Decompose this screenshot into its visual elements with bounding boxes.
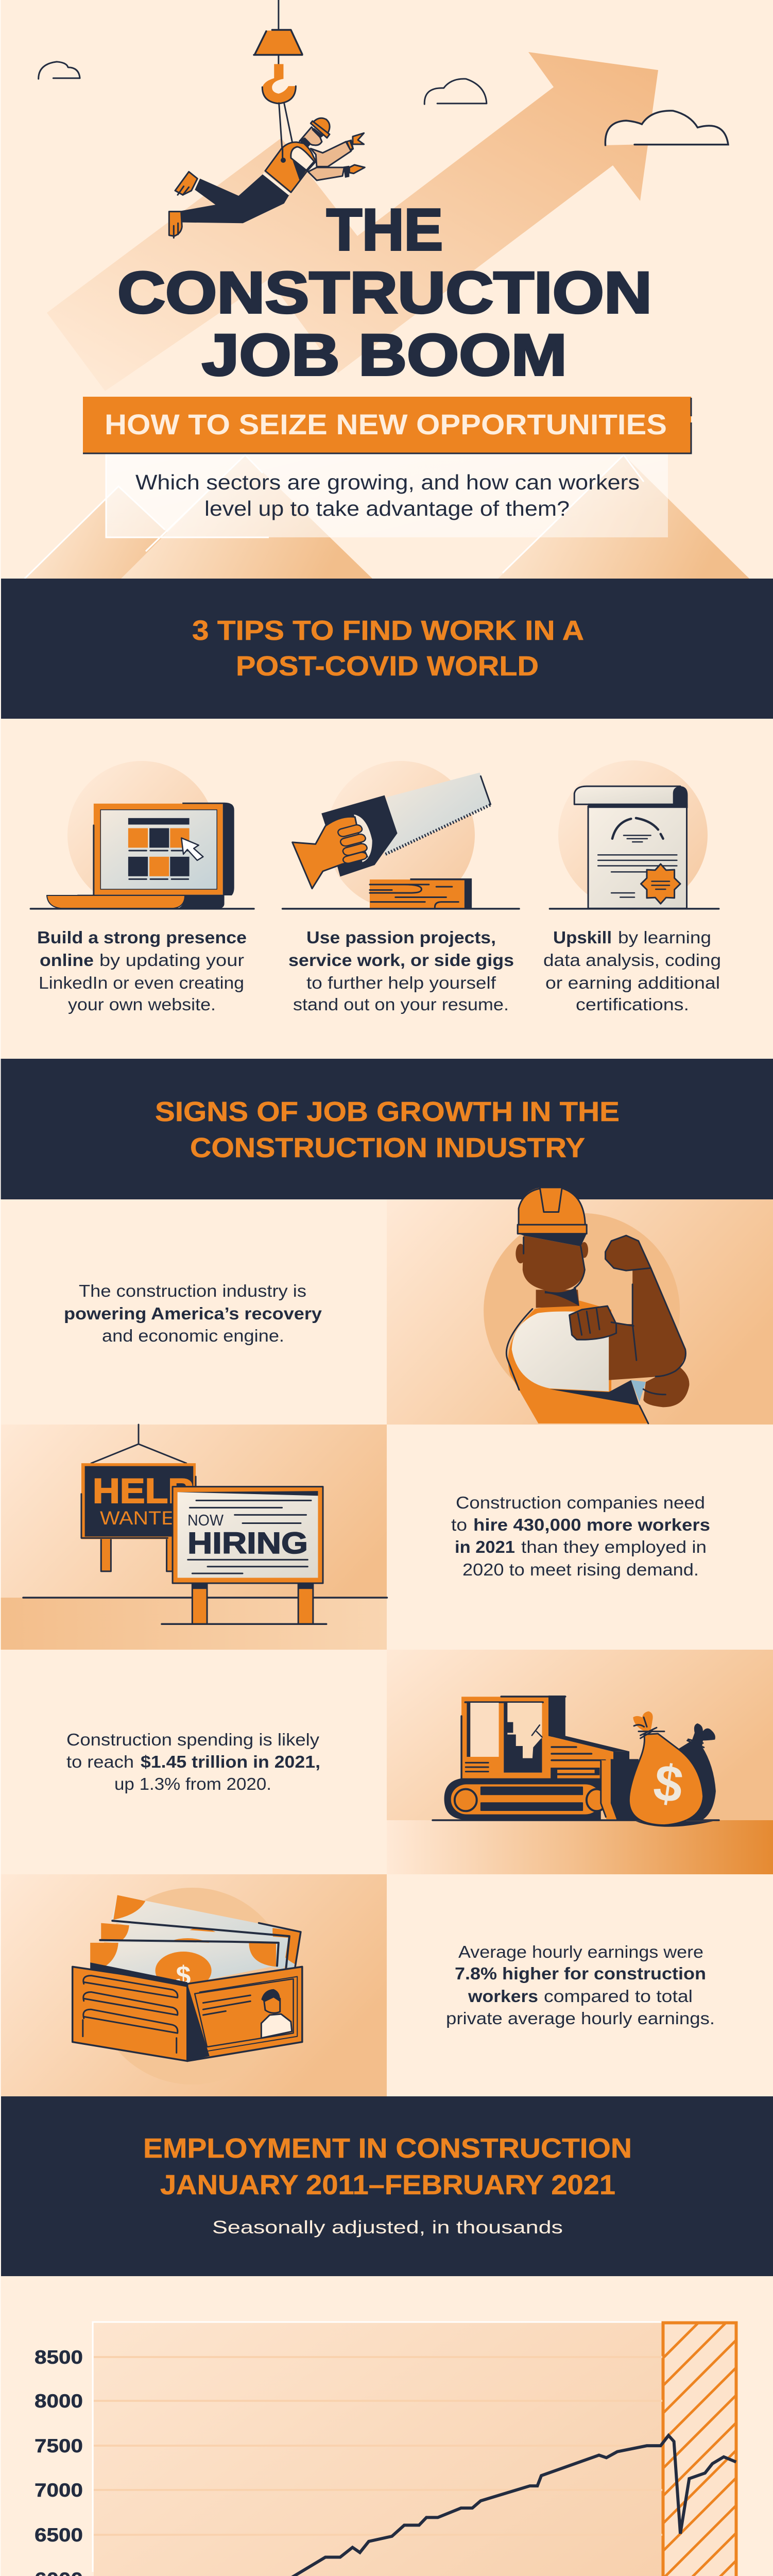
text: hire 430,000 workers: 2020 to meet rising demand. (462, 1560, 699, 1579)
text: hire 430,000 workers (451, 1493, 710, 1579)
title: THE (327, 197, 443, 263)
text: hire 430,000 workers: Construction companies need (456, 1493, 705, 1512)
illustration: help wanted sign: HELP (93, 1471, 193, 1511)
background panel left (0, 1874, 387, 2096)
intro text: Which sectors are growing, and how can workers (135, 470, 640, 494)
data line (94, 2435, 736, 2576)
tip 2 text: Use passion projects, (306, 928, 496, 947)
panel: employment heading: Seasonally adjusted, in thousands (212, 2217, 563, 2238)
subtitle banner (83, 397, 691, 453)
tip 3 text: by learning (618, 928, 711, 947)
tip 1 text: Build a strong presence (37, 928, 247, 947)
panel: 3 tips heading: POST-COVID WORLD (236, 651, 539, 682)
text: powering recovery: The construction industry is (79, 1281, 306, 1300)
grid lines (94, 2357, 662, 2576)
y axis labels: 6500 (35, 2524, 83, 2546)
background panel left (0, 1425, 387, 1650)
tip 2 text: to further help yourself (306, 973, 496, 992)
illustration: worker hanging from crane (169, 103, 365, 238)
illustration: now hiring sign: NOW (187, 1511, 224, 1529)
floor band (0, 1598, 387, 1650)
illustration: help wanted sign (81, 1425, 196, 1571)
text: construction spending: Construction spending is likely (66, 1730, 320, 1749)
mountains background (25, 455, 749, 579)
tip 1 text: online (40, 951, 94, 970)
panel: hiring row (0, 1425, 710, 1650)
hero section (25, 0, 749, 579)
y axis labels (35, 2347, 83, 2576)
icon: cloud right (605, 111, 728, 145)
text: hourly earnings: private average hourly earnings. (446, 2009, 715, 2028)
panel: employment heading: EMPLOYMENT IN CONSTRUCTION (143, 2133, 632, 2164)
y axis labels: 7500 (35, 2435, 83, 2456)
illustration: wallet with cash: $ (176, 1961, 191, 1991)
text: hire 430,000 workers: hire 430,000 more workers (473, 1515, 710, 1534)
y axis labels: 7000 (35, 2480, 83, 2501)
text: construction spending: up 1.3% from 2020. (114, 1774, 271, 1793)
text: construction spending: $1.45 trillion in 2021, (141, 1752, 320, 1771)
title: CONSTRUCTION (117, 260, 652, 326)
panel: tip 3 upskill (543, 760, 721, 1014)
tip 1 text (37, 928, 247, 1014)
subtitle banner: HOW TO SEIZE NEW OPPORTUNITIES (105, 408, 667, 440)
text: hourly earnings: workers (468, 1987, 538, 2006)
tip 1 text: your own website. (68, 995, 216, 1014)
tip 3 text: data analysis, coding (543, 951, 721, 970)
text: construction spending: to reach (66, 1752, 134, 1771)
panel: employment heading (1, 2096, 773, 2276)
tip 2 text: service work, or side gigs (288, 951, 514, 970)
illustration: help wanted sign: WANTED (100, 1507, 191, 1529)
rising arrow background (47, 52, 658, 391)
text: hourly earnings: 7.8% higher for construction (455, 1964, 706, 1983)
y axis labels: 8500 (35, 2347, 83, 2368)
y axis labels: 8000 (35, 2391, 83, 2412)
illustration: money bags (433, 1711, 719, 1827)
text: hire 430,000 workers: than they employed in (521, 1537, 707, 1556)
text: construction spending (66, 1730, 320, 1793)
tip 3 text: certifications. (576, 995, 689, 1014)
illustration: flexing worker (484, 1188, 689, 1423)
tip 3 text: Upskill (553, 928, 612, 947)
intro text (135, 470, 640, 520)
panel: signs of job growth heading (1, 1059, 773, 1199)
panel: 3 tips heading: 3 TIPS TO FIND WORK IN A (192, 615, 584, 646)
panel: signs of job growth heading: CONSTRUCTION INDUSTRY (190, 1132, 585, 1163)
floor band (387, 1820, 773, 1874)
text: powering recovery (64, 1281, 322, 1345)
panel: 3 tips heading (1, 579, 773, 719)
translucent subtitle panel (106, 453, 668, 537)
icon: laptop (30, 761, 254, 909)
title (117, 197, 652, 388)
panel: tip 2 passion projects (283, 761, 519, 1014)
tip 1 text: LinkedIn or even creating (39, 973, 244, 992)
icon: hand saw (283, 761, 519, 909)
left edge strip (0, 0, 1, 2576)
tip 2 text (288, 928, 514, 1014)
illustration: now hiring sign (23, 1487, 387, 1624)
background panel right (387, 1650, 773, 1820)
text: hourly earnings: compared to total (544, 1987, 693, 2006)
text: powering recovery: powering America’s recovery (64, 1304, 322, 1323)
text: hire 430,000 workers: in 2021 (455, 1537, 515, 1556)
text: powering recovery: and economic engine. (102, 1326, 284, 1345)
panel: spending row (66, 1650, 773, 1874)
text: hourly earnings: Average hourly earnings were (458, 1942, 703, 1961)
tip 1 text: by updating your (99, 951, 244, 970)
plot area (94, 2323, 663, 2576)
icon: cloud middle (424, 79, 487, 104)
illustration: bulldozer (444, 1696, 639, 1820)
text: hire 430,000 workers: to (451, 1515, 467, 1534)
text: hourly earnings (446, 1942, 715, 2028)
intro text: level up to take advantage of them? (204, 497, 570, 520)
line chart: employment in construction (35, 2321, 737, 2576)
panel: signs of job growth heading: SIGNS OF JOB GROWTH IN THE (155, 1096, 620, 1127)
tip 3 text: or earning additional (545, 973, 720, 992)
recession hatch box (661, 2321, 737, 2576)
icon: certificate (549, 760, 719, 910)
tip 3 text (543, 928, 721, 1014)
tip 2 text: stand out on your resume. (293, 995, 509, 1014)
illustration: now hiring sign: HIRING (187, 1527, 308, 1560)
icon: crane hook (254, 0, 303, 104)
panel: recovery row (64, 1188, 773, 1425)
panel: tip 1 online presence (30, 761, 254, 1014)
panel: employment heading: JANUARY 2011–FEBRUARY 2021 (160, 2170, 615, 2200)
illustration: wallet with cash (73, 1895, 302, 2061)
background circle (94, 1888, 290, 2084)
icon: cloud left (39, 62, 80, 79)
background panel right (387, 1199, 773, 1425)
illustration: money bags: $ (650, 1753, 686, 1815)
panel: earnings row (0, 1874, 715, 2096)
title: JOB BOOM (202, 323, 567, 388)
